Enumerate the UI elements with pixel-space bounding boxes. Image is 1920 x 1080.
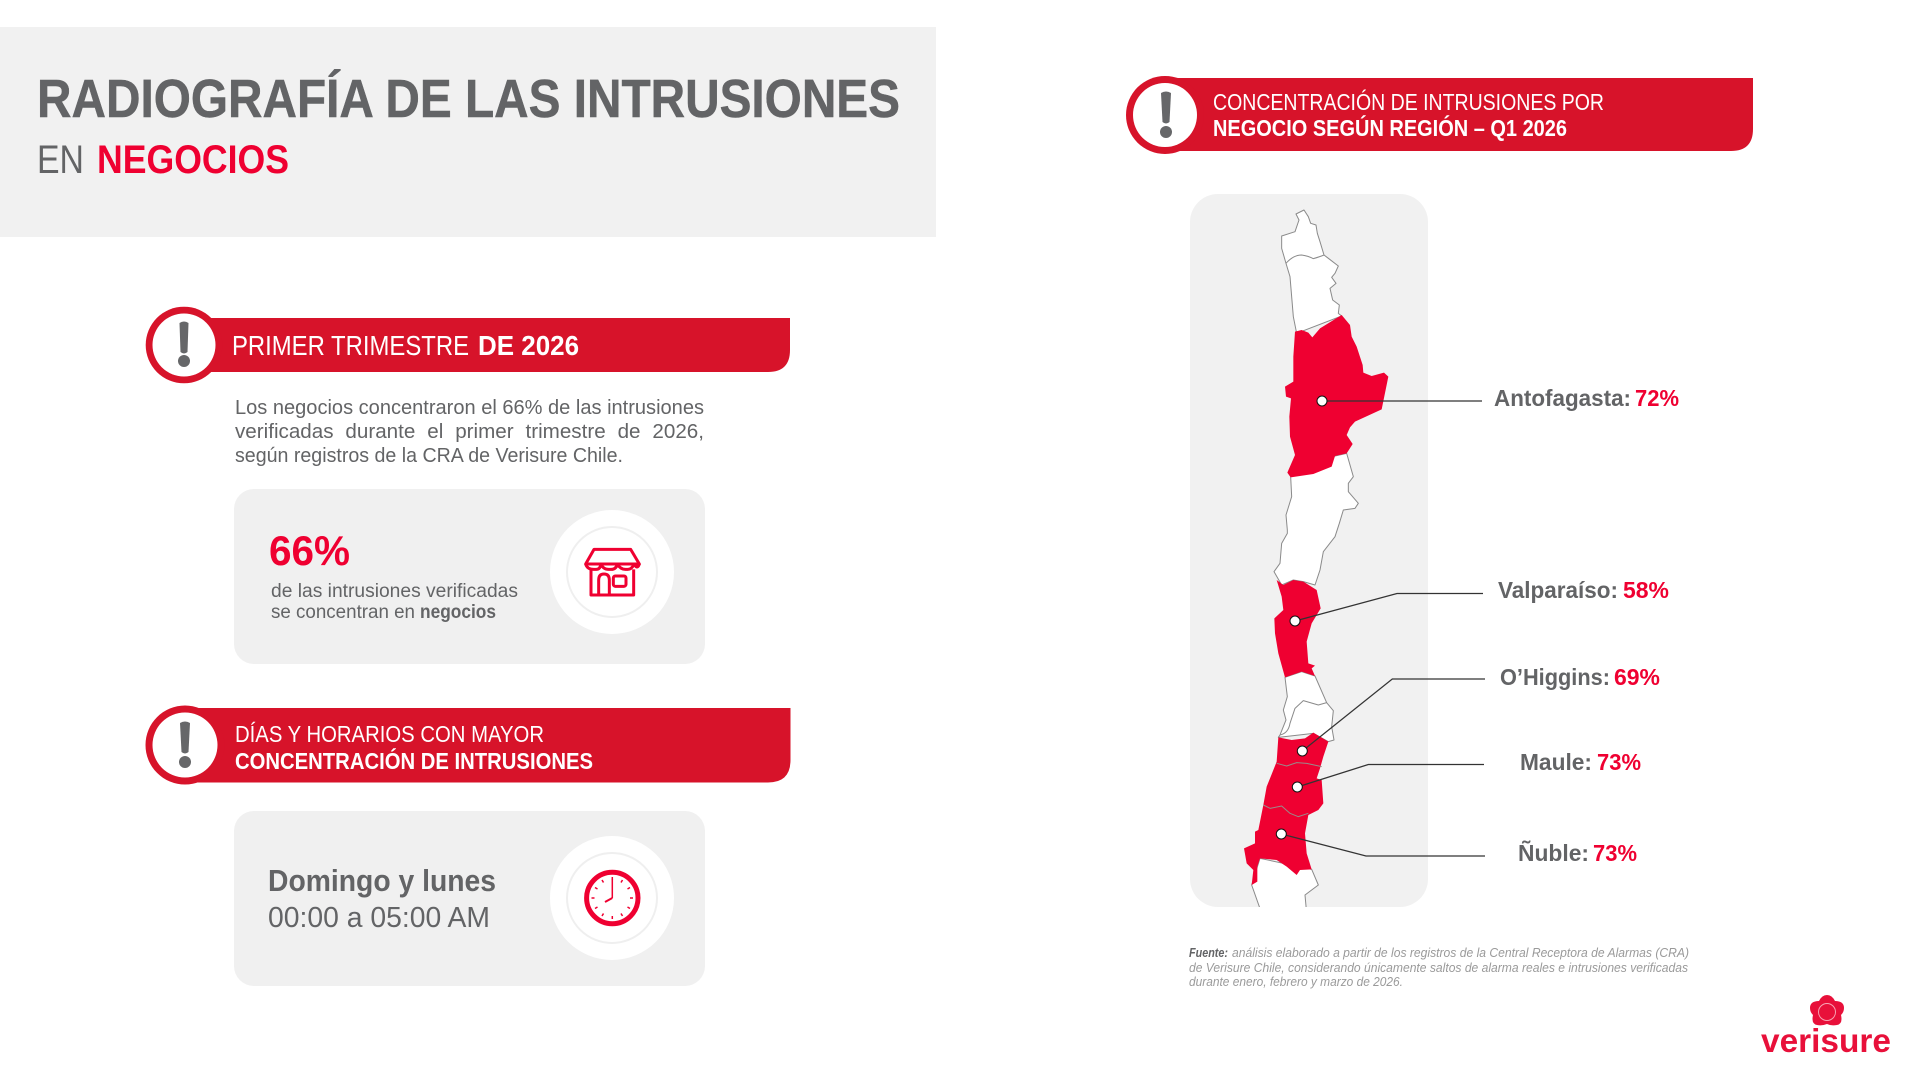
banner heading: DÍAS Y HORARIOS CON MAYOR: [235, 721, 544, 747]
banner heading: DE 2026: [478, 330, 579, 361]
days: Domingo y lunes: [268, 863, 496, 898]
banner heading: [235, 721, 593, 774]
label: Ñuble: 73%: [1593, 840, 1637, 866]
icon: exclamation: [178, 322, 190, 367]
leader line: Valparaíso: [1295, 594, 1483, 621]
region: central white: [1278, 672, 1334, 742]
leader line: Ñuble: [1281, 834, 1485, 856]
label: O'Higgins: O’Higgins:: [1500, 664, 1610, 690]
leader line: O'Higgins: [1302, 679, 1485, 751]
region: atacama white: [1274, 453, 1358, 585]
marker: O'Higgins: [1297, 746, 1307, 756]
wordmark: verisure: [1761, 1022, 1891, 1059]
text block: intro: verificadas durante el primer trimestre de 2026,: [235, 421, 704, 443]
label: Antofagasta: Antofagasta:: [1494, 385, 1631, 411]
source note: análisis elaborado a partir de los registros de la Central Receptora de Alarmas (CRA): [1232, 945, 1689, 960]
banner heading: CONCENTRACIÓN DE INTRUSIONES: [235, 747, 593, 774]
label: Valparaíso: 58%: [1623, 577, 1669, 603]
region: O'Higgins Maule Ñuble: [1244, 733, 1328, 885]
stat description: se concentran en: [271, 602, 415, 623]
icon: clock: [550, 836, 674, 960]
map regions: [1244, 210, 1388, 913]
region: south white: [1252, 858, 1318, 913]
stat description: negocios: [420, 602, 496, 623]
logo: verisure: [1761, 995, 1891, 1059]
label: Maule: Maule:: [1520, 749, 1592, 775]
source note: Fuente:: [1189, 945, 1228, 960]
icon: flower: [1810, 995, 1844, 1025]
label: Valparaíso: Valparaíso:: [1498, 577, 1618, 603]
text block: intro: Los negocios concentraron el 66% de las intrusiones: [235, 397, 704, 419]
stat description: de las intrusiones verificadas: [271, 581, 518, 602]
panel: días y horario: [234, 811, 705, 986]
banner: concentración por región: [1126, 76, 1753, 154]
banner heading: PRIMER TRIMESTRE: [232, 330, 469, 361]
source note: de Verisure Chile, considerando únicamente saltos de alarma reales e intrusiones verificadas: [1189, 960, 1688, 975]
icon: exclamation: [179, 722, 191, 768]
region: north white: [1282, 210, 1342, 333]
icon: store: [550, 510, 674, 634]
subtitle: [37, 138, 289, 182]
subtitle: NEGOCIOS: [97, 138, 289, 182]
banner heading: [1213, 89, 1604, 141]
panel: map of Chile: [1190, 194, 1485, 913]
marker: Ñuble: [1276, 829, 1286, 839]
banner heading: CONCENTRACIÓN DE INTRUSIONES POR: [1213, 89, 1604, 115]
region: Antofagasta: [1285, 315, 1388, 477]
banner: días y horarios: [146, 706, 790, 784]
label: Maule: 73%: [1597, 749, 1641, 775]
region dividers: [1263, 763, 1322, 817]
label: Antofagasta: 72%: [1635, 385, 1679, 411]
source note: durante enero, febrero y marzo de 2026.: [1189, 974, 1403, 989]
label: Maule: [1520, 749, 1641, 775]
source note: [1189, 945, 1689, 989]
marker: Maule: [1292, 782, 1302, 792]
text block: intro: según registros de la CRA de Verisure Chile.: [235, 445, 623, 467]
text block: intro: [235, 397, 704, 467]
leader line: Antofagasta: [1322, 400, 1482, 402]
marker: Valparaíso: [1290, 616, 1300, 626]
marker: Antofagasta: [1317, 396, 1327, 406]
label: Ñuble: Ñuble:: [1518, 839, 1589, 866]
region: Valparaíso: [1274, 580, 1321, 677]
panel: 66% stat: [234, 489, 705, 664]
stat number: 66%: [269, 527, 350, 574]
subtitle: EN: [37, 138, 84, 182]
hours: 00:00 a 05:00 AM: [268, 902, 490, 934]
banner heading: NEGOCIO SEGÚN REGIÓN – Q1 2026: [1213, 114, 1567, 141]
label: Ñuble: [1518, 839, 1637, 866]
panel: title: [0, 27, 936, 237]
banner: primer trimestre: [146, 307, 790, 383]
leader line: Maule: [1297, 764, 1484, 787]
label: O'Higgins: 69%: [1614, 664, 1660, 690]
title heading: RADIOGRAFÍA DE LAS INTRUSIONES: [37, 69, 900, 129]
icon: exclamation: [1160, 92, 1172, 138]
stat description: [271, 581, 518, 623]
